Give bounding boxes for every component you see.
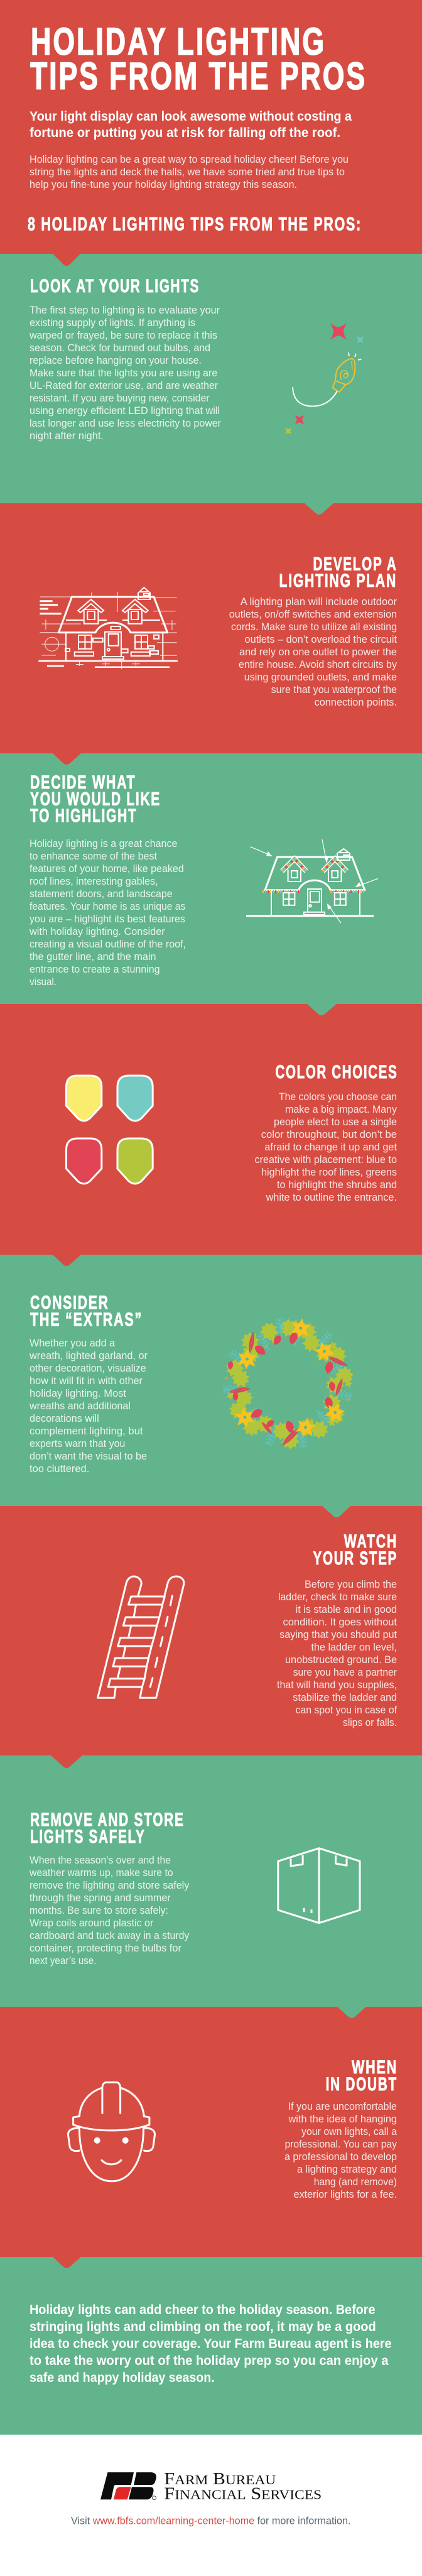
body text: Make sure that the lights you are using are	[30, 367, 217, 379]
header background	[0, 0, 422, 254]
notch	[53, 1255, 81, 1266]
body text: warped or frayed, be sure to replace it this	[29, 329, 217, 341]
panel background	[0, 503, 422, 753]
body text: using energy efficient LED lighting that will	[30, 405, 220, 417]
body text: cardboard and tuck away in a sturdy	[30, 1929, 190, 1941]
body text: wreaths and additional	[29, 1400, 131, 1412]
icon: wreath	[222, 1317, 355, 1449]
title: HOLIDAY LIGHTING	[31, 20, 326, 63]
panel background	[0, 1506, 422, 1755]
closing text: idea to check your coverage. Your Farm Bureau agent is here	[30, 2337, 392, 2351]
body text: entrance to create a stunning	[30, 963, 160, 975]
body text: to enhance some of the best	[30, 850, 157, 862]
logo: Farm Bureau Financial Services	[100, 2469, 322, 2503]
body text: can spot you in case of	[296, 1704, 397, 1716]
panel: color choices	[0, 1004, 422, 1255]
body text	[29, 1337, 148, 1475]
body text: hang (and remove)	[314, 2176, 397, 2188]
heading: CONSIDER	[30, 1292, 109, 1313]
closing text: Holiday lights can add cheer to the holiday season. Before	[30, 2303, 376, 2317]
body text: next year’s use.	[30, 1955, 96, 1967]
body text: it is stable and in good	[296, 1603, 397, 1615]
logo: Farm Bureau Financial Services: FARM BUREAU	[164, 2469, 276, 2488]
body text: to highlight the shrubs and	[277, 1179, 397, 1191]
body text	[255, 1091, 397, 1203]
heading	[279, 554, 397, 591]
icon: red bulb	[67, 1138, 102, 1184]
body text: A lighting plan will include outdoor	[241, 596, 397, 608]
panel: decide what to highlight	[0, 753, 422, 1004]
subtitle: fortune or putting you at risk for falling off the roof.	[30, 126, 340, 140]
body text: months. Be sure to store safely:	[30, 1904, 168, 1916]
body text: exterior lights for a fee.	[294, 2188, 397, 2200]
notch	[337, 2007, 366, 2018]
body text: that will hand you supplies,	[277, 1679, 397, 1691]
body text: The colors you choose can	[279, 1091, 397, 1103]
panel background	[0, 1004, 422, 1255]
heading: THE “EXTRAS”	[30, 1309, 143, 1330]
body text: white to outline the entrance.	[266, 1191, 397, 1203]
body text: remove the lighting and store safely	[30, 1879, 190, 1891]
notch	[53, 254, 80, 266]
body text: holiday lighting. Most	[30, 1387, 126, 1399]
body text: through the spring and summer	[30, 1892, 171, 1904]
closing text: safe and happy holiday season.	[30, 2371, 215, 2385]
subtitle: Your light display can look awesome without costing a	[30, 109, 352, 124]
body text: unobstructed ground. Be	[285, 1654, 397, 1666]
body text: entire house. Avoid short circuits by	[239, 658, 397, 670]
notch	[307, 1004, 337, 1015]
heading	[313, 1531, 398, 1569]
panel: remove and store lights	[0, 1755, 422, 2007]
body text: ladder, check to make sure	[278, 1591, 397, 1603]
body text: sure you have a partner	[293, 1666, 397, 1678]
icon: house with lights and arrows	[246, 839, 378, 923]
body text: other decoration, visualize	[30, 1362, 146, 1374]
closing text	[30, 2303, 392, 2385]
body text: replace before hanging on your house.	[30, 354, 202, 366]
heading: WATCH	[344, 1531, 398, 1552]
heading: LIGHTS SAFELY	[30, 1826, 146, 1847]
title	[30, 20, 367, 97]
heading: REMOVE AND STORE	[30, 1809, 185, 1830]
panel: when in doubt	[0, 2007, 422, 2257]
body text	[229, 596, 397, 708]
body text: features of your home, like peaked	[30, 863, 184, 875]
closing text: stringing lights and climbing on the roof, it may be a good	[30, 2320, 376, 2334]
panel: header	[0, 0, 422, 254]
body text: experts warn that you	[30, 1438, 125, 1449]
panel background	[0, 2007, 422, 2257]
intro text: Holiday lighting can be a great way to spread holiday cheer! Before you	[30, 153, 349, 165]
panel: watch your step	[0, 1506, 422, 1755]
icon: house blueprint	[38, 587, 178, 669]
body text: Whether you add a	[30, 1337, 116, 1349]
body text	[277, 1578, 397, 1728]
body text: the gutter line, and the main	[30, 951, 156, 963]
icon: green bulb	[117, 1138, 153, 1184]
footer background	[0, 2435, 422, 2576]
panel background	[0, 1755, 422, 2007]
body text: existing supply of lights. If anything is	[30, 317, 195, 329]
notch	[322, 1506, 350, 1517]
intro text: help you fine-tune your holiday lighting strategy this season.	[30, 178, 297, 190]
heading: YOU WOULD LIKE	[30, 789, 161, 809]
body text: Holiday lighting is a great chance	[30, 838, 177, 849]
body text	[29, 1854, 190, 1967]
heading: DECIDE WHAT	[30, 772, 136, 793]
notch	[51, 1755, 82, 1768]
body text: If you are uncomfortable	[288, 2100, 397, 2112]
body text: The first step to lighting is to evaluate your	[30, 304, 220, 316]
icon: teal bulb	[117, 1076, 153, 1121]
heading	[30, 1809, 185, 1847]
body text: professional. You can pay	[285, 2138, 397, 2150]
body text: highlight the roof lines, greens	[261, 1166, 397, 1178]
body text: last longer and use less electricity to power	[30, 417, 221, 429]
body text: too cluttered.	[30, 1463, 89, 1475]
body text	[29, 304, 221, 442]
icon: ladder	[98, 1576, 184, 1698]
icon: yellow bulb	[67, 1076, 102, 1121]
panel background	[0, 254, 422, 503]
body text: with the idea of hanging	[288, 2113, 397, 2125]
body text: complement lighting, but	[30, 1425, 143, 1437]
heading	[30, 1292, 143, 1330]
body text: how it will fit in with other	[30, 1375, 143, 1387]
body text	[284, 2100, 398, 2200]
panel background	[0, 2257, 422, 2435]
body text: slips or falls.	[343, 1716, 397, 1728]
body text: creating a visual outline of the roof,	[30, 938, 186, 950]
heading: WHEN	[352, 2057, 398, 2078]
body text: resistant. If you are buying new, consider	[30, 392, 210, 404]
panel background	[0, 1255, 422, 1506]
heading: LOOK AT YOUR LIGHTS	[30, 276, 200, 297]
intro text: string the lights and deck the halls, we have some tried and true tips to	[30, 166, 345, 178]
closing text: to take the worry out of the holiday prep so you can enjoy a	[30, 2354, 389, 2368]
body text: Wrap coils around plastic or	[30, 1917, 154, 1929]
body text: make a big impact. Many	[285, 1103, 397, 1115]
panel: closing message	[0, 2257, 422, 2435]
body text: saying that you should put	[279, 1629, 397, 1640]
body text: When the season’s over and the	[30, 1854, 171, 1866]
body text: statement doors, and landscape	[30, 888, 173, 900]
subtitle	[30, 109, 352, 140]
logo: Farm Bureau Financial Services: FINANCIAL SERVICES	[164, 2484, 322, 2503]
body text: visual.	[30, 976, 57, 988]
body text: afraid to change it up and get	[264, 1141, 397, 1153]
icon: light bulb with sparkles	[285, 323, 364, 434]
body text: container, protecting the bulbs for	[30, 1942, 181, 1954]
panel: look at your lights	[0, 254, 422, 503]
body text: sure that you waterproof the	[271, 684, 397, 696]
notch	[305, 503, 333, 515]
icon: storage box	[278, 1848, 360, 1923]
body text	[29, 838, 186, 988]
body text: don’t want the visual to be	[30, 1450, 147, 1462]
body text: the ladder on level,	[311, 1641, 397, 1653]
body text: outlets – don’t overload the circuit	[245, 633, 397, 645]
body text: a professional to develop	[284, 2151, 397, 2163]
body text: and rely on one outlet to power the	[239, 646, 397, 658]
body text: wreath, lighted garland, or	[29, 1350, 148, 1362]
panel: develop a lighting plan	[0, 503, 422, 753]
body text: weather warms up, make sure to	[29, 1867, 173, 1879]
panel background	[0, 753, 422, 1004]
body text: using grounded outlets, and make	[244, 671, 397, 683]
panel: footer	[0, 2435, 422, 2576]
body text: with holiday lighting. Consider	[29, 925, 165, 937]
body text: creative with placement: blue to	[255, 1154, 397, 1165]
notch	[53, 753, 81, 765]
body text: night after night.	[30, 430, 104, 442]
body text: outlets, on/off switches and extension	[229, 608, 397, 620]
body text: UL-Rated for exterior use, and are weather	[30, 379, 218, 391]
body text: color throughout, but don’t be	[261, 1128, 397, 1140]
body text: people elect to use a single	[274, 1116, 397, 1128]
body text: features. Your home is as unique as	[30, 900, 185, 912]
body text: cords. Make sure to utilize all existing	[231, 621, 397, 633]
footer link text: Visit www.fbfs.com/learning-center-home for more information.	[71, 2514, 350, 2527]
intro text	[30, 153, 349, 190]
heading	[326, 2057, 398, 2095]
body text: Before you climb the	[305, 1578, 397, 1590]
body text: decorations will	[30, 1412, 99, 1424]
body text: your own lights, call a	[301, 2126, 398, 2137]
body text: roof lines, interesting gables,	[30, 875, 158, 887]
body text: stabilize the ladder and	[293, 1691, 397, 1703]
heading: TO HIGHLIGHT	[30, 805, 137, 826]
panel: consider the extras	[0, 1255, 422, 1506]
body text: connection points.	[315, 696, 397, 708]
body text: condition. It goes without	[283, 1616, 397, 1628]
icon: worker with hard hat	[68, 2082, 155, 2181]
body text: a lighting strategy and	[297, 2163, 397, 2175]
heading	[30, 772, 161, 826]
notch	[53, 2257, 81, 2268]
body text: you are – highlight its best features	[30, 913, 185, 925]
body text: season. Check for burned out bulbs, and	[30, 342, 210, 354]
